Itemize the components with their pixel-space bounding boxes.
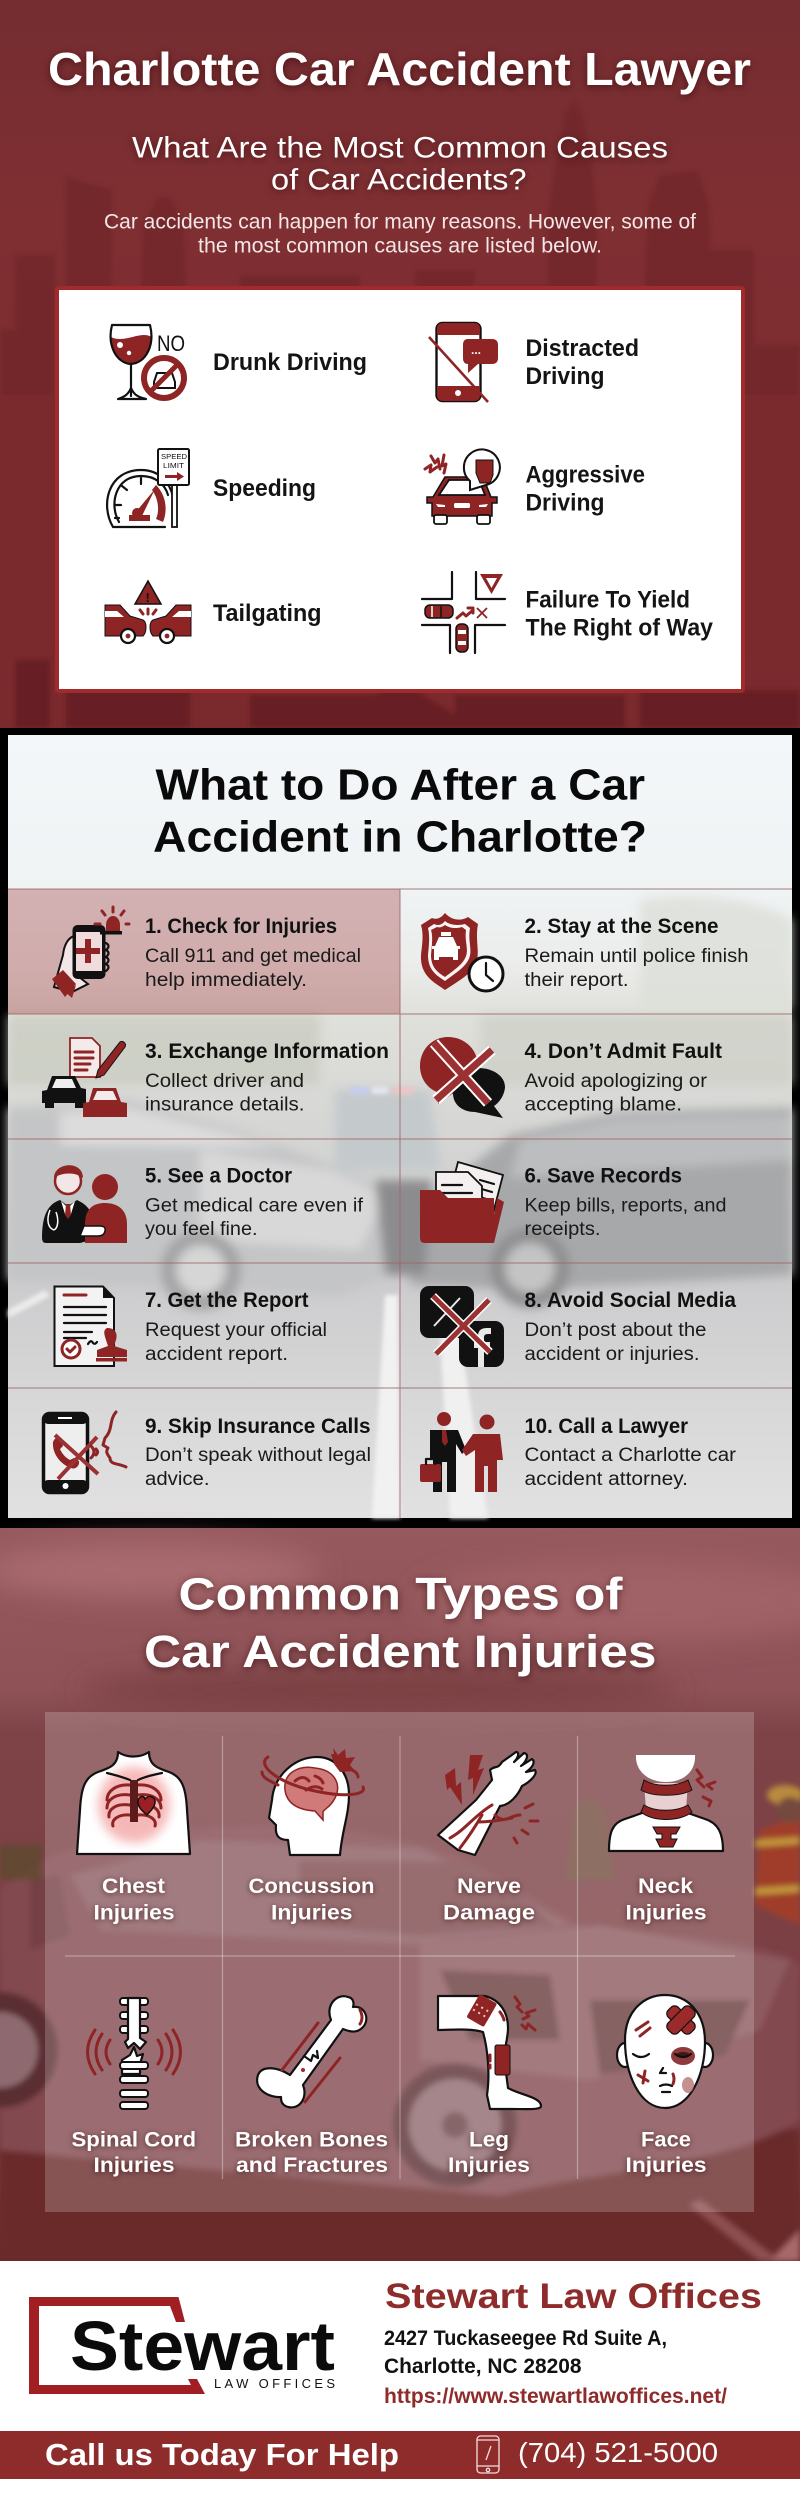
injury: neck: Neck: [638, 1875, 693, 1898]
step 3: exchange information: 3. Exchange Information: [145, 1040, 389, 1063]
step 8: avoid social media: 8. Avoid Social Media: [524, 1289, 736, 1312]
step 5: see a doctor: you feel fine.: [145, 1219, 258, 1240]
heading: what to do: [153, 760, 647, 862]
step 2: stay at the scene: [421, 913, 748, 991]
cause: failure to yield: The Right of Way: [526, 614, 714, 642]
heading: common injuries: Common Types of: [178, 1568, 624, 1620]
subtitle: What Are the Most Common Causes: [132, 132, 668, 164]
title: Charlotte Car Accident Lawyer: [48, 43, 751, 95]
injury: face: Face: [641, 2128, 691, 2152]
injury: leg: Injuries: [448, 2154, 530, 2177]
step 9: skip insurance calls: [43, 1412, 371, 1493]
logo: Stewart Law Offices: LAW OFFICES: [214, 2376, 335, 2391]
cause: speeding: [107, 449, 316, 527]
step 2: stay at the scene: their report.: [524, 970, 628, 991]
injury: leg: [438, 1994, 541, 2177]
contact details: Charlotte, NC 28208: [384, 2355, 582, 2378]
contact details: https://www.stewartlawoffices.net/: [384, 2385, 727, 2408]
cause: speeding: SPEED: [161, 452, 188, 461]
cause: failure to yield: [422, 572, 714, 653]
cause: distracted driving: Distracted: [526, 335, 639, 362]
step 2: stay at the scene: Remain until police finish: [524, 946, 748, 967]
cause: tailgating: [105, 581, 322, 643]
injury: neck: Injuries: [626, 1902, 706, 1924]
panel: highlighted step cell: [8, 889, 400, 1014]
step 4: don't admit fault: 4. Don’t Admit Fault: [524, 1040, 722, 1063]
section background: wrecked car photo: [0, 1528, 800, 2261]
step 8: avoid social media: Don’t post about the: [524, 1320, 706, 1341]
step 7: get the report: 7. Get the Report: [145, 1289, 308, 1312]
injury: nerve damage: Damage: [443, 1902, 535, 1924]
step 6: save records: Keep bills, reports, and: [524, 1196, 726, 1216]
injury: chest: Injuries: [94, 1902, 174, 1924]
injury: broken bones: and Fractures: [236, 2154, 388, 2177]
step 7: get the report: accident report.: [145, 1344, 288, 1365]
injury: nerve damage: Nerve: [457, 1875, 521, 1898]
cause: speeding: Speeding: [213, 475, 316, 502]
step 3: exchange information: Collect driver and: [145, 1071, 304, 1092]
footer: white band: [0, 2261, 800, 2511]
section background: Charlotte skyline: [0, 0, 800, 728]
step 1: check for injuries: Call 911 and get medical: [145, 946, 361, 967]
step 6: save records: 6. Save Records: [524, 1164, 682, 1188]
cause: aggressive driving: Driving: [526, 490, 604, 516]
cause: distracted driving: ...: [471, 343, 481, 357]
step 4: don't admit fault: [420, 1037, 722, 1118]
step 8: avoid social media: accident or injuries.: [524, 1344, 700, 1365]
contact details: [384, 2277, 762, 2408]
step 3: exchange information: insurance details.: [145, 1094, 304, 1116]
cause: drunk driving: Drunk Driving: [213, 349, 367, 376]
contact details: Stewart Law Offices: [385, 2277, 762, 2316]
heading: common injuries: Car Accident Injuries: [144, 1626, 656, 1677]
injury: concussion: Injuries: [271, 1902, 352, 1924]
black divider band: [0, 728, 800, 1528]
injury: broken bones: [235, 1996, 388, 2177]
call to action bar: (704) 521-5000: [518, 2437, 718, 2468]
injury: chest: Chest: [102, 1875, 165, 1898]
panel: common causes: [57, 288, 743, 691]
injury: face: [617, 1995, 713, 2177]
subtitle: [132, 132, 668, 196]
cause: drunk driving: [111, 325, 367, 399]
cause: distracted driving: [429, 323, 639, 402]
injury: face: Injuries: [626, 2154, 706, 2177]
intro text: the most common causes are listed below.: [198, 234, 602, 258]
heading: what to do: Accident in Charlotte?: [153, 812, 647, 862]
step 1: check for injuries: 1. Check for Injuries: [145, 915, 337, 938]
step 9: skip insurance calls: Don’t speak without legal: [145, 1445, 371, 1466]
panel: injuries: [45, 1712, 754, 2212]
step 10: call a lawyer: Contact a Charlotte car: [524, 1445, 737, 1466]
cause: aggressive driving: Aggressive: [526, 462, 645, 488]
injury: spinal cord: Spinal Cord: [72, 2128, 196, 2152]
step 5: see a doctor: 5. See a Doctor: [145, 1164, 292, 1188]
step 3: exchange information: [42, 1038, 389, 1117]
step 4: don't admit fault: accepting blame.: [524, 1094, 682, 1116]
injury: leg: Leg: [469, 2128, 509, 2152]
injury: chest: [77, 1752, 190, 1924]
cause: failure to yield: Failure To Yield: [526, 586, 690, 614]
step 8: avoid social media: [420, 1286, 736, 1367]
section background: crash photo: [8, 735, 792, 1518]
step 4: don't admit fault: Avoid apologizing or: [524, 1071, 708, 1092]
cause: tailgating: !: [146, 590, 150, 605]
step 10: call a lawyer: 10. Call a Lawyer: [524, 1415, 688, 1438]
step 1: check for injuries: help immediately.: [145, 970, 307, 991]
injury: nerve damage: [438, 1752, 538, 1924]
icon: phone: [477, 2436, 499, 2473]
step 7: get the report: [54, 1286, 327, 1366]
heading: common injuries: [144, 1568, 656, 1677]
cause: aggressive driving: [425, 449, 645, 524]
step 10: call a lawyer: [420, 1412, 737, 1492]
step 6: save records: [420, 1162, 726, 1243]
cause: distracted driving: Driving: [526, 363, 604, 390]
contact details: 2427 Tuckaseegee Rd Suite A,: [384, 2327, 667, 2350]
step 9: skip insurance calls: advice.: [145, 1469, 210, 1490]
injury: spinal cord: [72, 1998, 196, 2177]
step 5: see a doctor: Get medical care even if: [145, 1196, 364, 1216]
intro text: Car accidents can happen for many reasons. However, some of: [104, 210, 696, 234]
subtitle: of Car Accidents?: [271, 164, 526, 196]
injury: broken bones: Broken Bones: [235, 2128, 388, 2152]
call to action bar: Call us Today For Help: [45, 2437, 399, 2472]
step 1: check for injuries: [52, 907, 361, 998]
cause: speeding: LIMIT: [163, 461, 184, 470]
intro text: [104, 210, 696, 258]
step 10: call a lawyer: accident attorney.: [524, 1469, 688, 1490]
injury: neck: [609, 1755, 723, 1924]
cause: tailgating: Tailgating: [213, 600, 322, 627]
cause: drunk driving: NO: [157, 331, 185, 356]
call to action bar: [0, 2431, 800, 2479]
step 7: get the report: Request your official: [145, 1320, 327, 1341]
step 6: save records: receipts.: [524, 1219, 600, 1240]
step 9: skip insurance calls: 9. Skip Insurance Calls: [145, 1415, 370, 1438]
heading: what to do: What to Do After a Car: [156, 760, 645, 810]
logo: Stewart Law Offices: Stewart: [70, 2307, 335, 2385]
injury: spinal cord: Injuries: [94, 2154, 174, 2177]
step 5: see a doctor: [42, 1164, 364, 1243]
injury: concussion: Concussion: [248, 1875, 374, 1898]
step 2: stay at the scene: 2. Stay at the Scene: [524, 915, 718, 938]
injury: concussion: [248, 1748, 374, 1924]
logo: Stewart Law Offices: [29, 2297, 335, 2394]
